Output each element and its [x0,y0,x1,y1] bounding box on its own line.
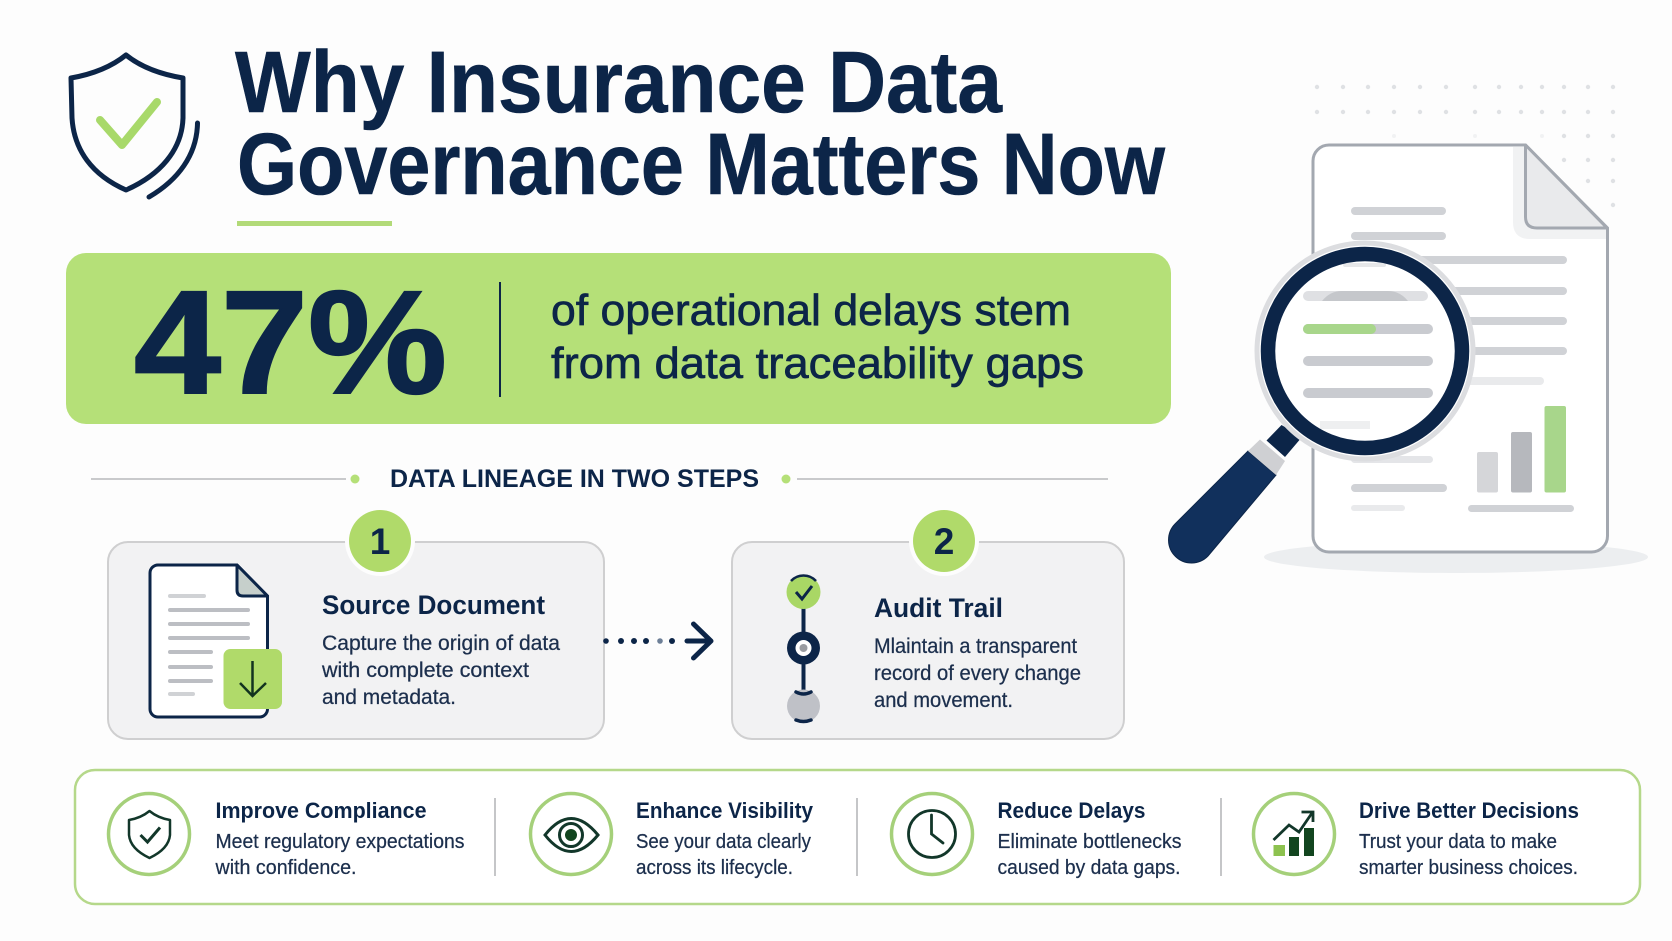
panel: step 1 source document [108,506,604,739]
benefit: drive better decisions: smarter business choices. [1359,857,1578,879]
document bar chart [1477,406,1566,492]
section heading: data lineage [91,465,1108,493]
title [235,34,1165,213]
section heading: data lineage: DATA LINEAGE IN TWO STEPS [390,465,759,493]
handle [1266,425,1302,457]
benefit: enhance visibility: across its lifecycle. [636,857,793,879]
panel: key statistic [66,253,1171,425]
benefit: reduce delays [892,794,1182,879]
statistic value: 47% [134,261,447,425]
statistic description: from data traceability gaps [551,339,1084,388]
step 2 text [874,593,1081,712]
magnifying glass [1169,243,1473,563]
panel: step 2 audit trail [732,506,1124,739]
icon: shield with check [71,55,198,197]
title: Governance Matters Now [237,116,1165,213]
step 1 text: and metadata. [322,686,456,709]
step 1 text [321,590,560,709]
benefit: improve compliance: Improve Compliance [216,798,426,823]
benefit: improve compliance: with confidence. [215,857,356,879]
benefit: drive better decisions [1254,794,1579,879]
icon: audit timeline [786,575,820,722]
document text lines [1351,207,1574,512]
statistic description: of operational delays stem [551,286,1071,335]
document fold [1526,145,1607,228]
dot pattern [1315,85,1615,207]
step 2 text: Audit Trail [874,593,1003,623]
title: Why Insurance Data [235,34,1003,131]
step 1 text: with complete context [321,659,529,682]
benefit: drive better decisions: Trust your data to make [1359,831,1557,853]
benefit: reduce delays: Reduce Delays [998,798,1146,823]
benefit: improve compliance [108,794,464,879]
statistic description [551,286,1084,388]
illustration: document under magnifying glass [1169,85,1648,573]
badge: step 2: 2 [934,521,954,562]
benefit: reduce delays: caused by data gaps. [998,857,1180,879]
benefit: enhance visibility: See your data clearly [636,831,811,853]
icon: document with download [150,565,282,717]
badge: step 2 [909,506,979,576]
benefit: enhance visibility [530,794,814,879]
benefit: drive better decisions: Drive Better Decisions [1359,798,1579,823]
benefit: reduce delays: Eliminate bottlenecks [998,831,1182,853]
benefit: enhance visibility: Enhance Visibility [636,798,814,823]
step 2 text: and movement. [874,689,1013,712]
title underline [237,221,392,226]
step 2 text: Mlaintain a transparent [874,635,1077,658]
benefit: improve compliance: Meet regulatory expectations [216,831,464,853]
arrow: step 1 to step 2 [603,624,711,658]
step 1 text: Capture the origin of data [322,632,560,655]
panel: benefits strip [75,770,1640,904]
badge: step 1: 1 [370,521,390,562]
ground shadow [1264,541,1648,573]
lens [1257,243,1473,459]
step 2 text: record of every change [874,662,1081,685]
step 1 text: Source Document [322,590,545,620]
badge: step 1 [345,506,415,576]
document page [1313,145,1608,552]
